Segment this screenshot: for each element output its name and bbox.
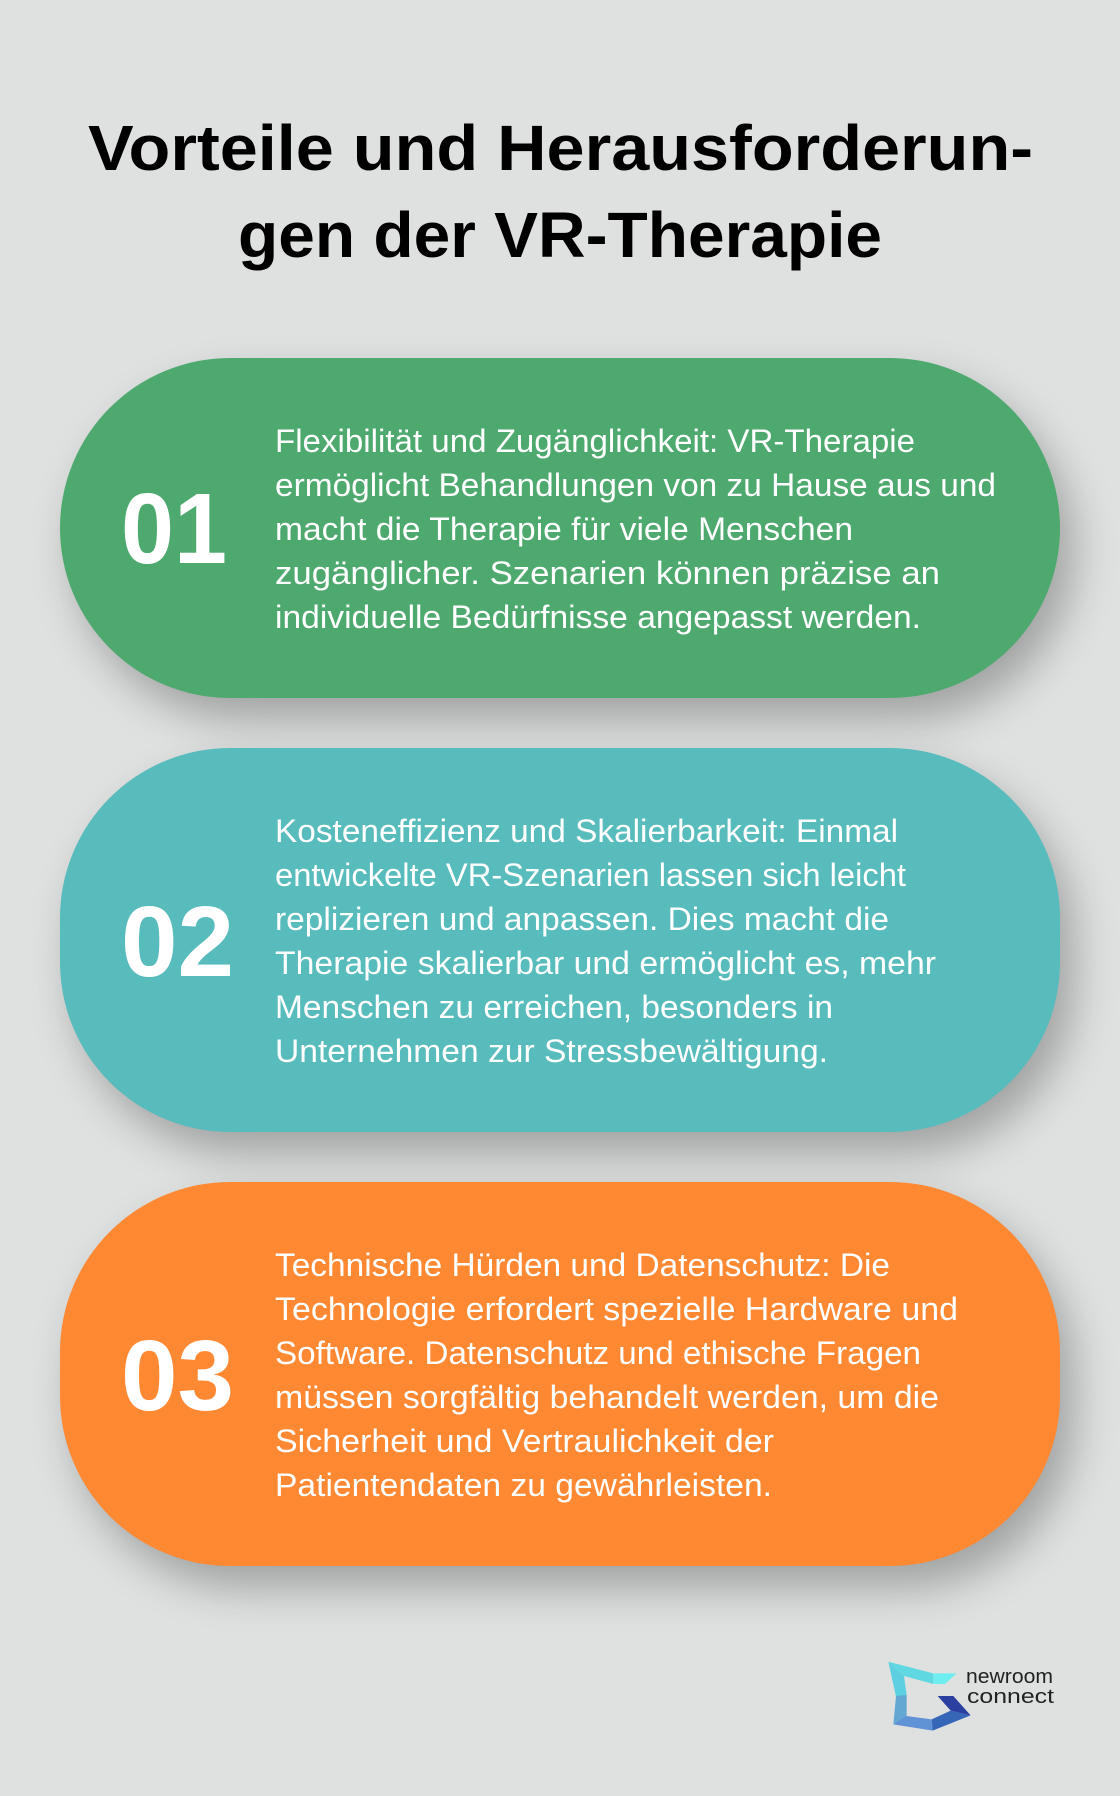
logo wordmark [966,1666,1055,1708]
text block: card 02: Unternehmen zur Stressbewältigung. [275,1033,828,1069]
logo wordmark: newroom [966,1666,1053,1688]
number 03: 03 [121,1320,234,1432]
text block: card 03: Technische Hürden und Datenschutz: Die [275,1247,890,1283]
logo wordmark: connect [967,1686,1055,1708]
panel: card 01 background [60,358,1060,698]
panel: card 03 background [60,1182,1060,1566]
icon: newroom connect logo mark [888,1662,971,1731]
title [88,112,1033,271]
text block: card 03 [275,1247,958,1503]
number 02: 02 [121,886,234,998]
text block: card 02: Kosteneffizienz und Skalierbarkeit: Einmal [275,813,898,849]
text block: card 03: Sicherheit und Vertraulichkeit der [275,1423,774,1459]
text block: card 03: müssen sorgfältig behandelt werden, um die [275,1379,939,1415]
panel: card 02 background [60,748,1060,1132]
text block: card 01: Flexibilität und Zugänglichkeit: VR-Therapie [275,423,915,459]
text block: card 02 [275,813,936,1069]
text block: card 02: Therapie skalierbar und ermöglicht es, mehr [275,945,936,981]
text block: card 03: Technologie erfordert spezielle Hardware und [275,1291,958,1327]
number 01: 01 [121,473,227,585]
text block: card 02: Menschen zu erreichen, besonders in [275,989,833,1025]
text block: card 02: entwickelte VR-Szenarien lassen sich leicht [275,857,906,893]
title: Vorteile und Herausforderun- [88,112,1033,184]
text block: card 01: individuelle Bedürfnisse angepasst werden. [275,599,921,635]
text block: card 03: Patientendaten zu gewährleisten. [275,1467,772,1503]
text block: card 01: macht die Therapie für viele Menschen [275,511,853,547]
text block: card 01 [275,423,996,635]
text block: card 01: ermöglicht Behandlungen von zu Hause aus und [275,467,996,503]
text block: card 03: Software. Datenschutz und ethische Fragen [275,1335,921,1371]
title: gen der VR-Therapie [238,199,882,271]
text block: card 01: zugänglicher. Szenarien können präzise an [275,555,940,591]
text block: card 02: replizieren und anpassen. Dies macht die [275,901,889,937]
